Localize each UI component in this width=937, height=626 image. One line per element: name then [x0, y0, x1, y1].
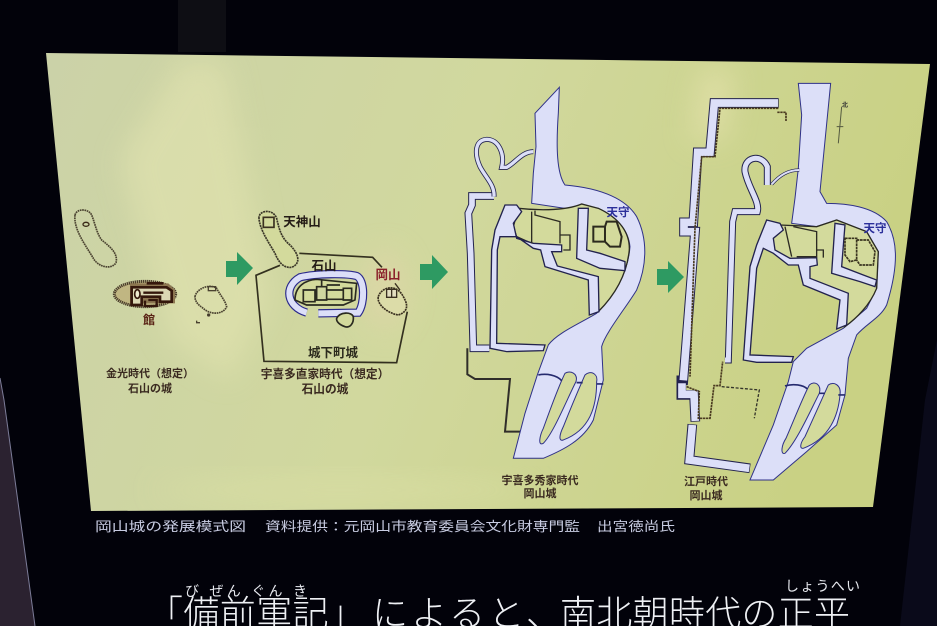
ruby: shohei: しょうへい [785, 578, 860, 594]
label: keep Hideie: 天守 [606, 205, 630, 219]
Tenjinyama fort [263, 217, 274, 227]
diagram: Ukita Naoie period Ishiyama castle [256, 211, 407, 363]
island tongues [540, 372, 597, 444]
castle ground [772, 220, 878, 327]
body text [147, 593, 850, 626]
castle ground [513, 204, 629, 312]
river [750, 83, 895, 480]
keep buildings [593, 222, 622, 247]
outer dotted ground [722, 387, 759, 418]
source caption [95, 519, 675, 534]
hill: Okayama outline [195, 286, 227, 313]
keep buildings [845, 238, 875, 265]
moat around keep [832, 223, 877, 287]
source caption: 資料提供：元岡山市教育委員会文化財専門監 [265, 519, 580, 534]
moat ring [289, 274, 363, 313]
Okayama fort [387, 283, 400, 297]
outermost moat [681, 103, 779, 468]
north arrow [837, 107, 843, 143]
river [513, 87, 645, 458]
caption: Ukita Hideie period: 岡山城 [524, 486, 556, 500]
town wall [256, 253, 407, 363]
hill: Tenjinyama [259, 211, 298, 267]
island tongues [782, 383, 840, 453]
moat around keep [577, 208, 625, 271]
small marks [196, 287, 216, 323]
source caption: 岡山城の発展模式図 [95, 519, 246, 534]
source caption: 出宮徳尚氏 [597, 519, 675, 534]
caption: Ukita Naoie period: 宇喜多直家時代（想定） [261, 368, 389, 381]
caption: Ukita Hideie period: 宇喜多秀家時代 [502, 475, 578, 487]
bridge lines [785, 385, 845, 395]
label: Tenjinyama: 天神山 [283, 214, 321, 229]
inner bank [687, 108, 786, 418]
inner partitions [532, 211, 570, 250]
diagram: Ukita Hideie period Okayama castle [467, 87, 645, 458]
inner moat [743, 220, 848, 362]
arrow: third [657, 261, 684, 293]
caption: Ukita Naoie period: 石山の城 [302, 382, 349, 396]
label: north mark: 北 [842, 101, 848, 109]
diagram: Kanemitsu period Ishiyama castle [75, 210, 227, 323]
label: castle town: 城下町城 [308, 345, 358, 360]
residence compound [114, 281, 176, 307]
caption: Kanemitsu period: 金光時代（想定） [106, 368, 194, 380]
hill: Tenjinyama outline [75, 210, 116, 267]
arrow: first [226, 252, 253, 285]
small hill [337, 313, 353, 327]
hill: Okayama [378, 288, 407, 315]
label: keep Edo: 天守 [864, 221, 886, 235]
bridge lines [538, 374, 603, 384]
mark: small ring [83, 222, 89, 226]
label: Ishiyama: 石山 [311, 259, 337, 273]
diagram: Edo period Okayama castle [681, 83, 895, 480]
inner partitions [785, 227, 823, 258]
southern wall [467, 348, 522, 432]
ruby: bizen gunki: び ぜん ぐん き [185, 583, 307, 599]
castle buildings [295, 279, 357, 305]
label: Okayama: 岡山 [375, 268, 401, 282]
arrow: second [420, 255, 448, 289]
caption: Kanemitsu period: 石山の城 [128, 381, 172, 395]
label: residence: 館 [143, 313, 155, 327]
panel: green map board [46, 53, 930, 511]
caption: Edo period: 岡山城 [690, 488, 722, 502]
middle moat [725, 158, 799, 360]
inner moat [490, 205, 599, 352]
caption: Edo period: 江戸時代 [684, 476, 728, 488]
outer moat [468, 139, 533, 348]
